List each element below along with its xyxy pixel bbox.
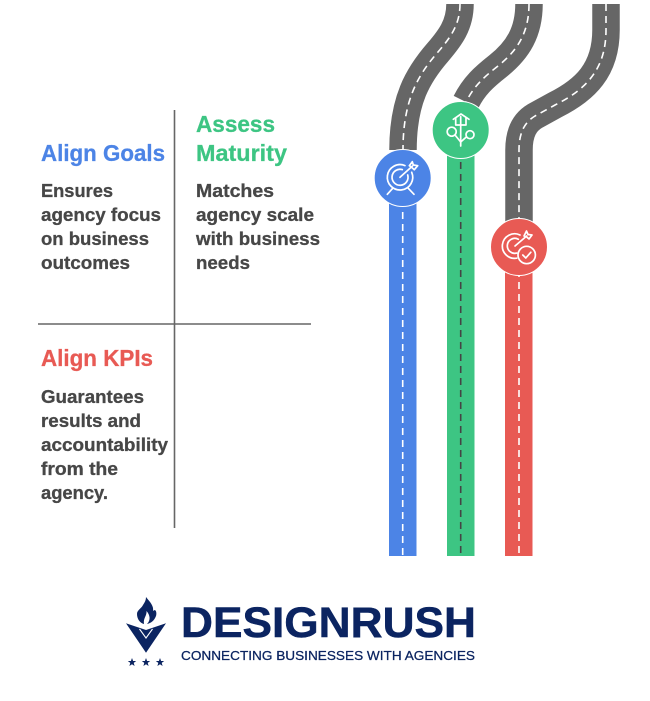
road 2: green path (447, 4, 529, 556)
text block: Align KPIs: results and (41, 410, 141, 431)
text block: Assess Maturity (195, 111, 320, 273)
text block: Align Goals: Align Goals (41, 140, 165, 166)
icon: red target with check badge (490, 218, 548, 276)
text block: Assess Maturity: agency scale (196, 204, 314, 225)
text block: Assess Maturity: needs (196, 252, 250, 273)
text block: Align KPIs: agency. (41, 482, 108, 503)
road 1: blue path (389, 4, 460, 556)
text block: Assess Maturity: Assess (196, 111, 275, 137)
text block: Assess Maturity: Matches (196, 180, 274, 201)
text block: Align Goals: outcomes (41, 252, 130, 273)
logo tagline: CONNECTING BUSINESSES WITH AGENCIES (181, 648, 475, 663)
icon: green house and branches badge (432, 102, 489, 158)
logo wordmark: DESIGNRUSH (181, 599, 476, 647)
logo: DesignRush (126, 597, 476, 666)
quadrant axis lines (38, 110, 311, 528)
text block: Align Goals: Ensures (41, 180, 113, 201)
text block: Align Goals (41, 140, 165, 273)
text block: Align Goals: on business (41, 228, 149, 249)
text block: Assess Maturity: Maturity (196, 140, 287, 166)
text block: Align KPIs: Guarantees (41, 386, 144, 407)
road 3: red path (505, 4, 606, 556)
text block: Align Goals: agency focus (41, 204, 161, 225)
icon: flame and V shield with stars (126, 597, 166, 666)
text block: Align KPIs: Align KPIs (41, 345, 153, 371)
text block: Align KPIs: from the (41, 458, 118, 479)
text block: Align KPIs: accountability (41, 434, 169, 455)
text block: Align KPIs (41, 345, 169, 503)
text block: Assess Maturity: with business (195, 228, 320, 249)
icon: blue target badge (374, 150, 431, 206)
